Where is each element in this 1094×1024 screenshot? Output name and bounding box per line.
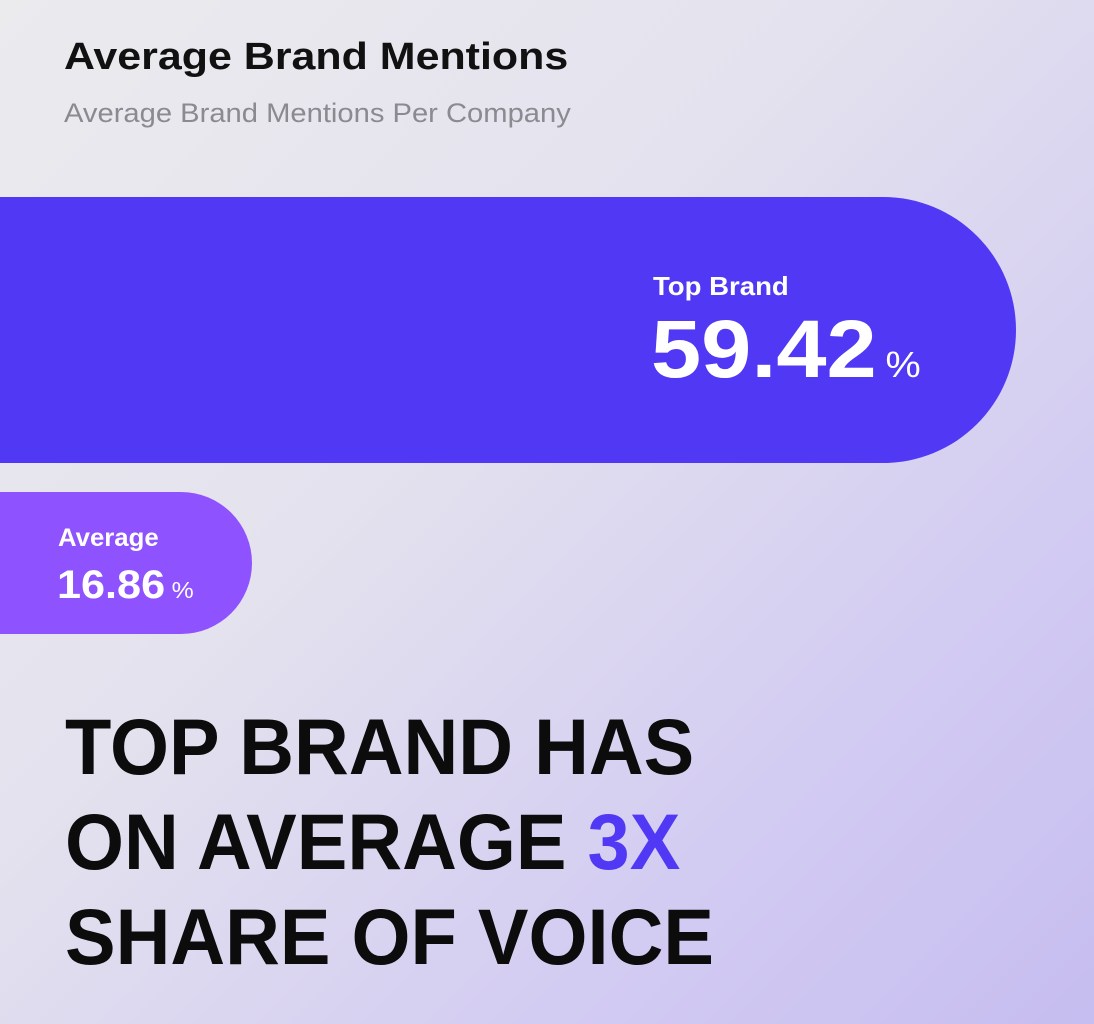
headline: SHARE OF VOICE <box>65 892 714 981</box>
headline: TOP BRAND HAS <box>65 702 694 791</box>
label: average: Average <box>58 524 159 552</box>
title: Average Brand Mentions <box>64 36 568 78</box>
headline <box>65 702 714 981</box>
bar: average <box>0 492 252 634</box>
value: 59.42%: 59.42% <box>651 304 921 395</box>
label: top brand: Top Brand <box>653 271 789 301</box>
value: 16.86%: 16.86 % <box>57 563 194 607</box>
headline: ON AVERAGE 3X <box>65 797 680 886</box>
bar: top brand <box>0 197 1016 463</box>
subtitle: Average Brand Mentions Per Company <box>64 98 571 128</box>
